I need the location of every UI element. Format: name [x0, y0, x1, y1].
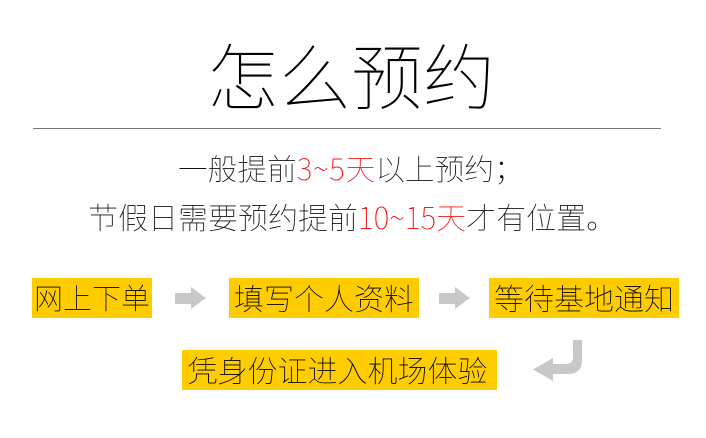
- step 1: book online: 网上下单: [34, 276, 150, 318]
- text block: booking notice line 1: 一般提前3~5天以上预约；: [178, 146, 524, 189]
- step 2: fill in details: 填写个人资料: [234, 275, 414, 319]
- title: 怎么预约: [207, 20, 495, 125]
- step 3: wait for base notice: 等待基地通知: [494, 275, 674, 319]
- text block: booking notice line 2: 节假日需要预约提前10~15天才有位置。: [88, 194, 616, 238]
- step 4: enter airfield with ID: 凭身份证进入机场体验: [188, 347, 488, 391]
